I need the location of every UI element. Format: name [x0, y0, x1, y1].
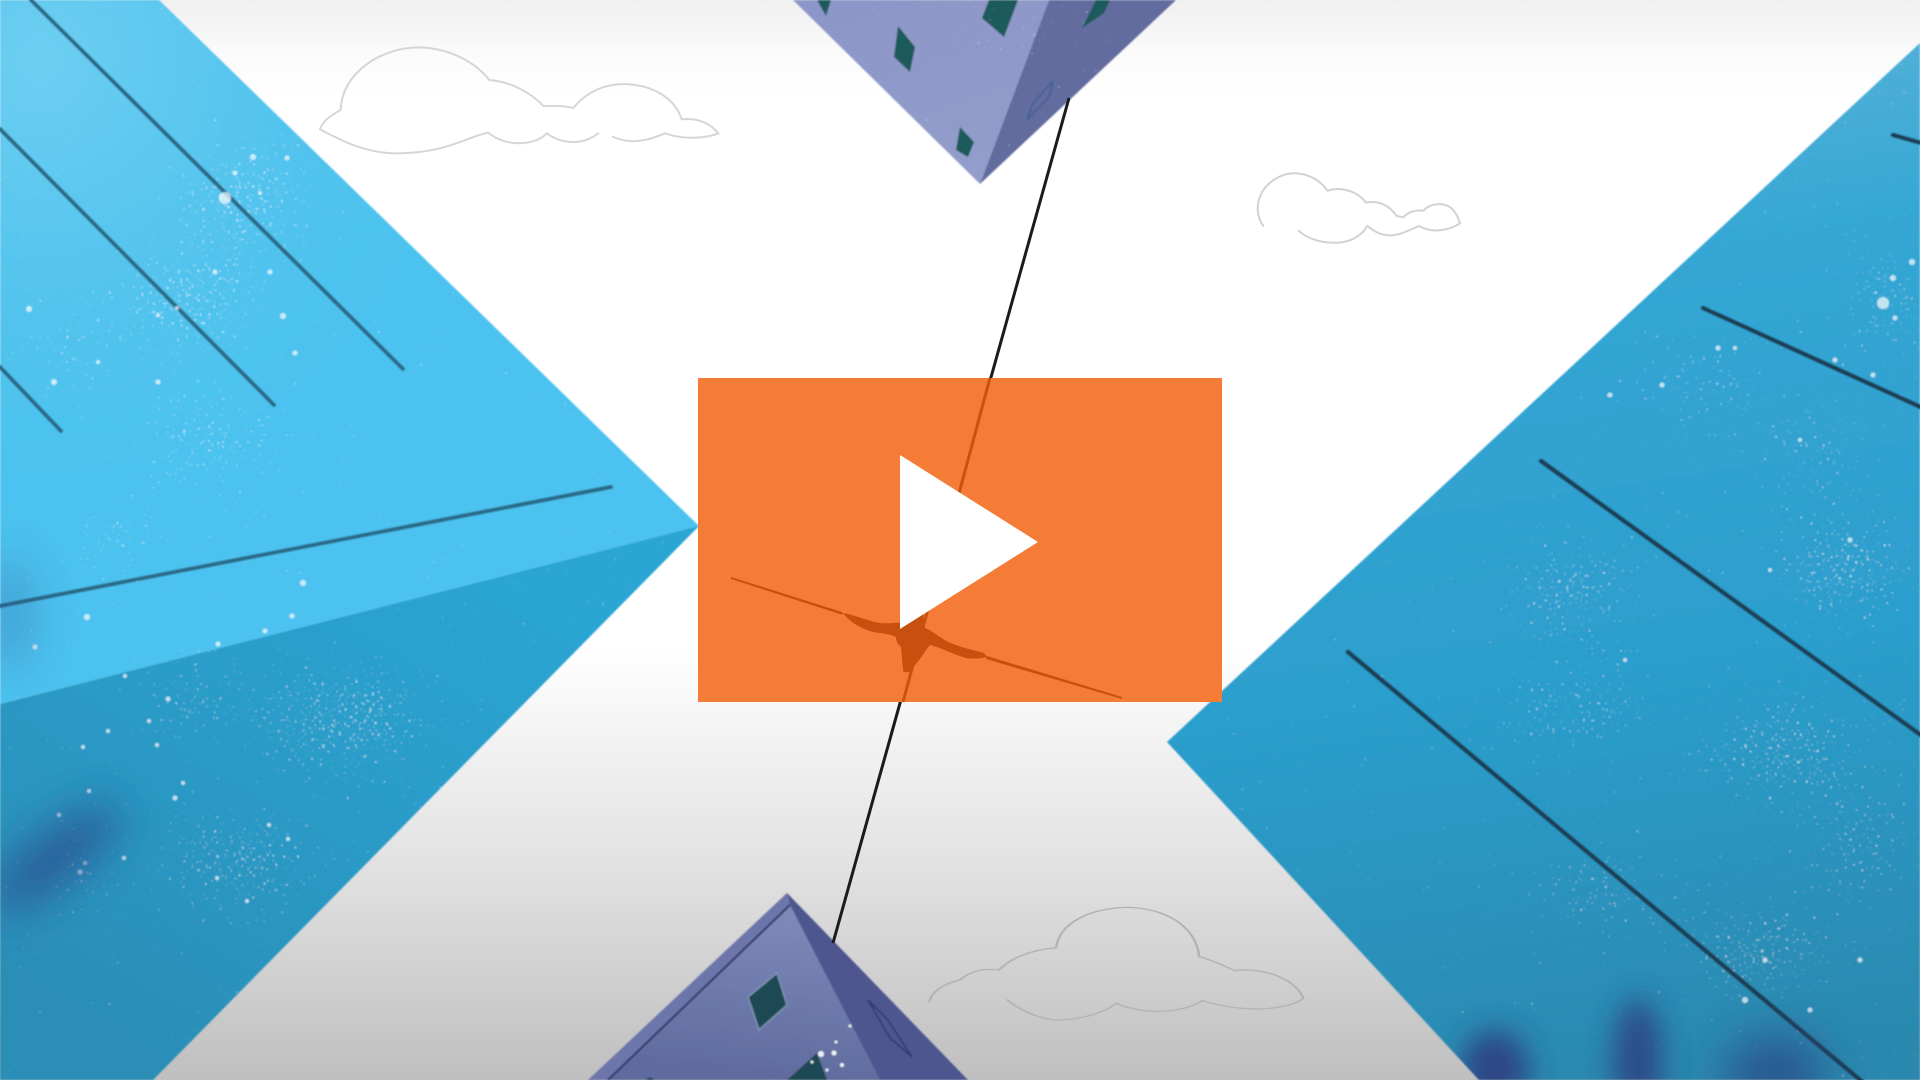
- left building: shaded face: [0, 526, 699, 1080]
- right building: face: [1167, 43, 1920, 1080]
- top building: left face: [793, 0, 1049, 184]
- tightrope walker silhouette with pole: [731, 577, 1122, 699]
- bottom building: front face: [608, 905, 880, 1080]
- cloud: top right: [1258, 173, 1460, 243]
- bottom building: left strip: [588, 893, 880, 1080]
- play button overlay: [698, 378, 1222, 702]
- right building: speckle texture: [1490, 250, 1920, 990]
- top building: right face: [980, 0, 1176, 184]
- right building: window lines: [1348, 135, 1920, 1080]
- left building: blurred foliage: [0, 555, 133, 926]
- top building: speckle texture: [925, 7, 1085, 47]
- rope seen through panel: [903, 378, 990, 702]
- right building: large paint flecks: [1608, 259, 1915, 1012]
- left building: window lines: [0, 0, 611, 606]
- right blue building: [1167, 43, 1920, 1080]
- bottom building: windows: [645, 973, 827, 1080]
- tightrope: [833, 98, 1069, 943]
- left building: speckle texture: [20, 145, 430, 900]
- bottom building: outlined window: [868, 1000, 912, 1057]
- bottom building: edge line: [608, 905, 790, 1080]
- bottom purple building: [588, 893, 968, 1080]
- top building: windows: [817, 0, 1110, 157]
- left building: lit face: [0, 0, 699, 704]
- bottom building: right face: [787, 893, 968, 1080]
- left building: large paint flecks: [26, 154, 306, 903]
- bottom building: paint flecks: [810, 1024, 852, 1072]
- top purple building: [793, 0, 1176, 184]
- top building: outlined window: [1027, 81, 1053, 120]
- play icon: [900, 455, 1038, 629]
- cloud: top left: [320, 47, 718, 153]
- cloud: bottom: [929, 907, 1303, 1020]
- left blue building: [0, 0, 699, 1080]
- orange panel: [698, 378, 1222, 702]
- right building: blurred foliage: [1461, 998, 1825, 1080]
